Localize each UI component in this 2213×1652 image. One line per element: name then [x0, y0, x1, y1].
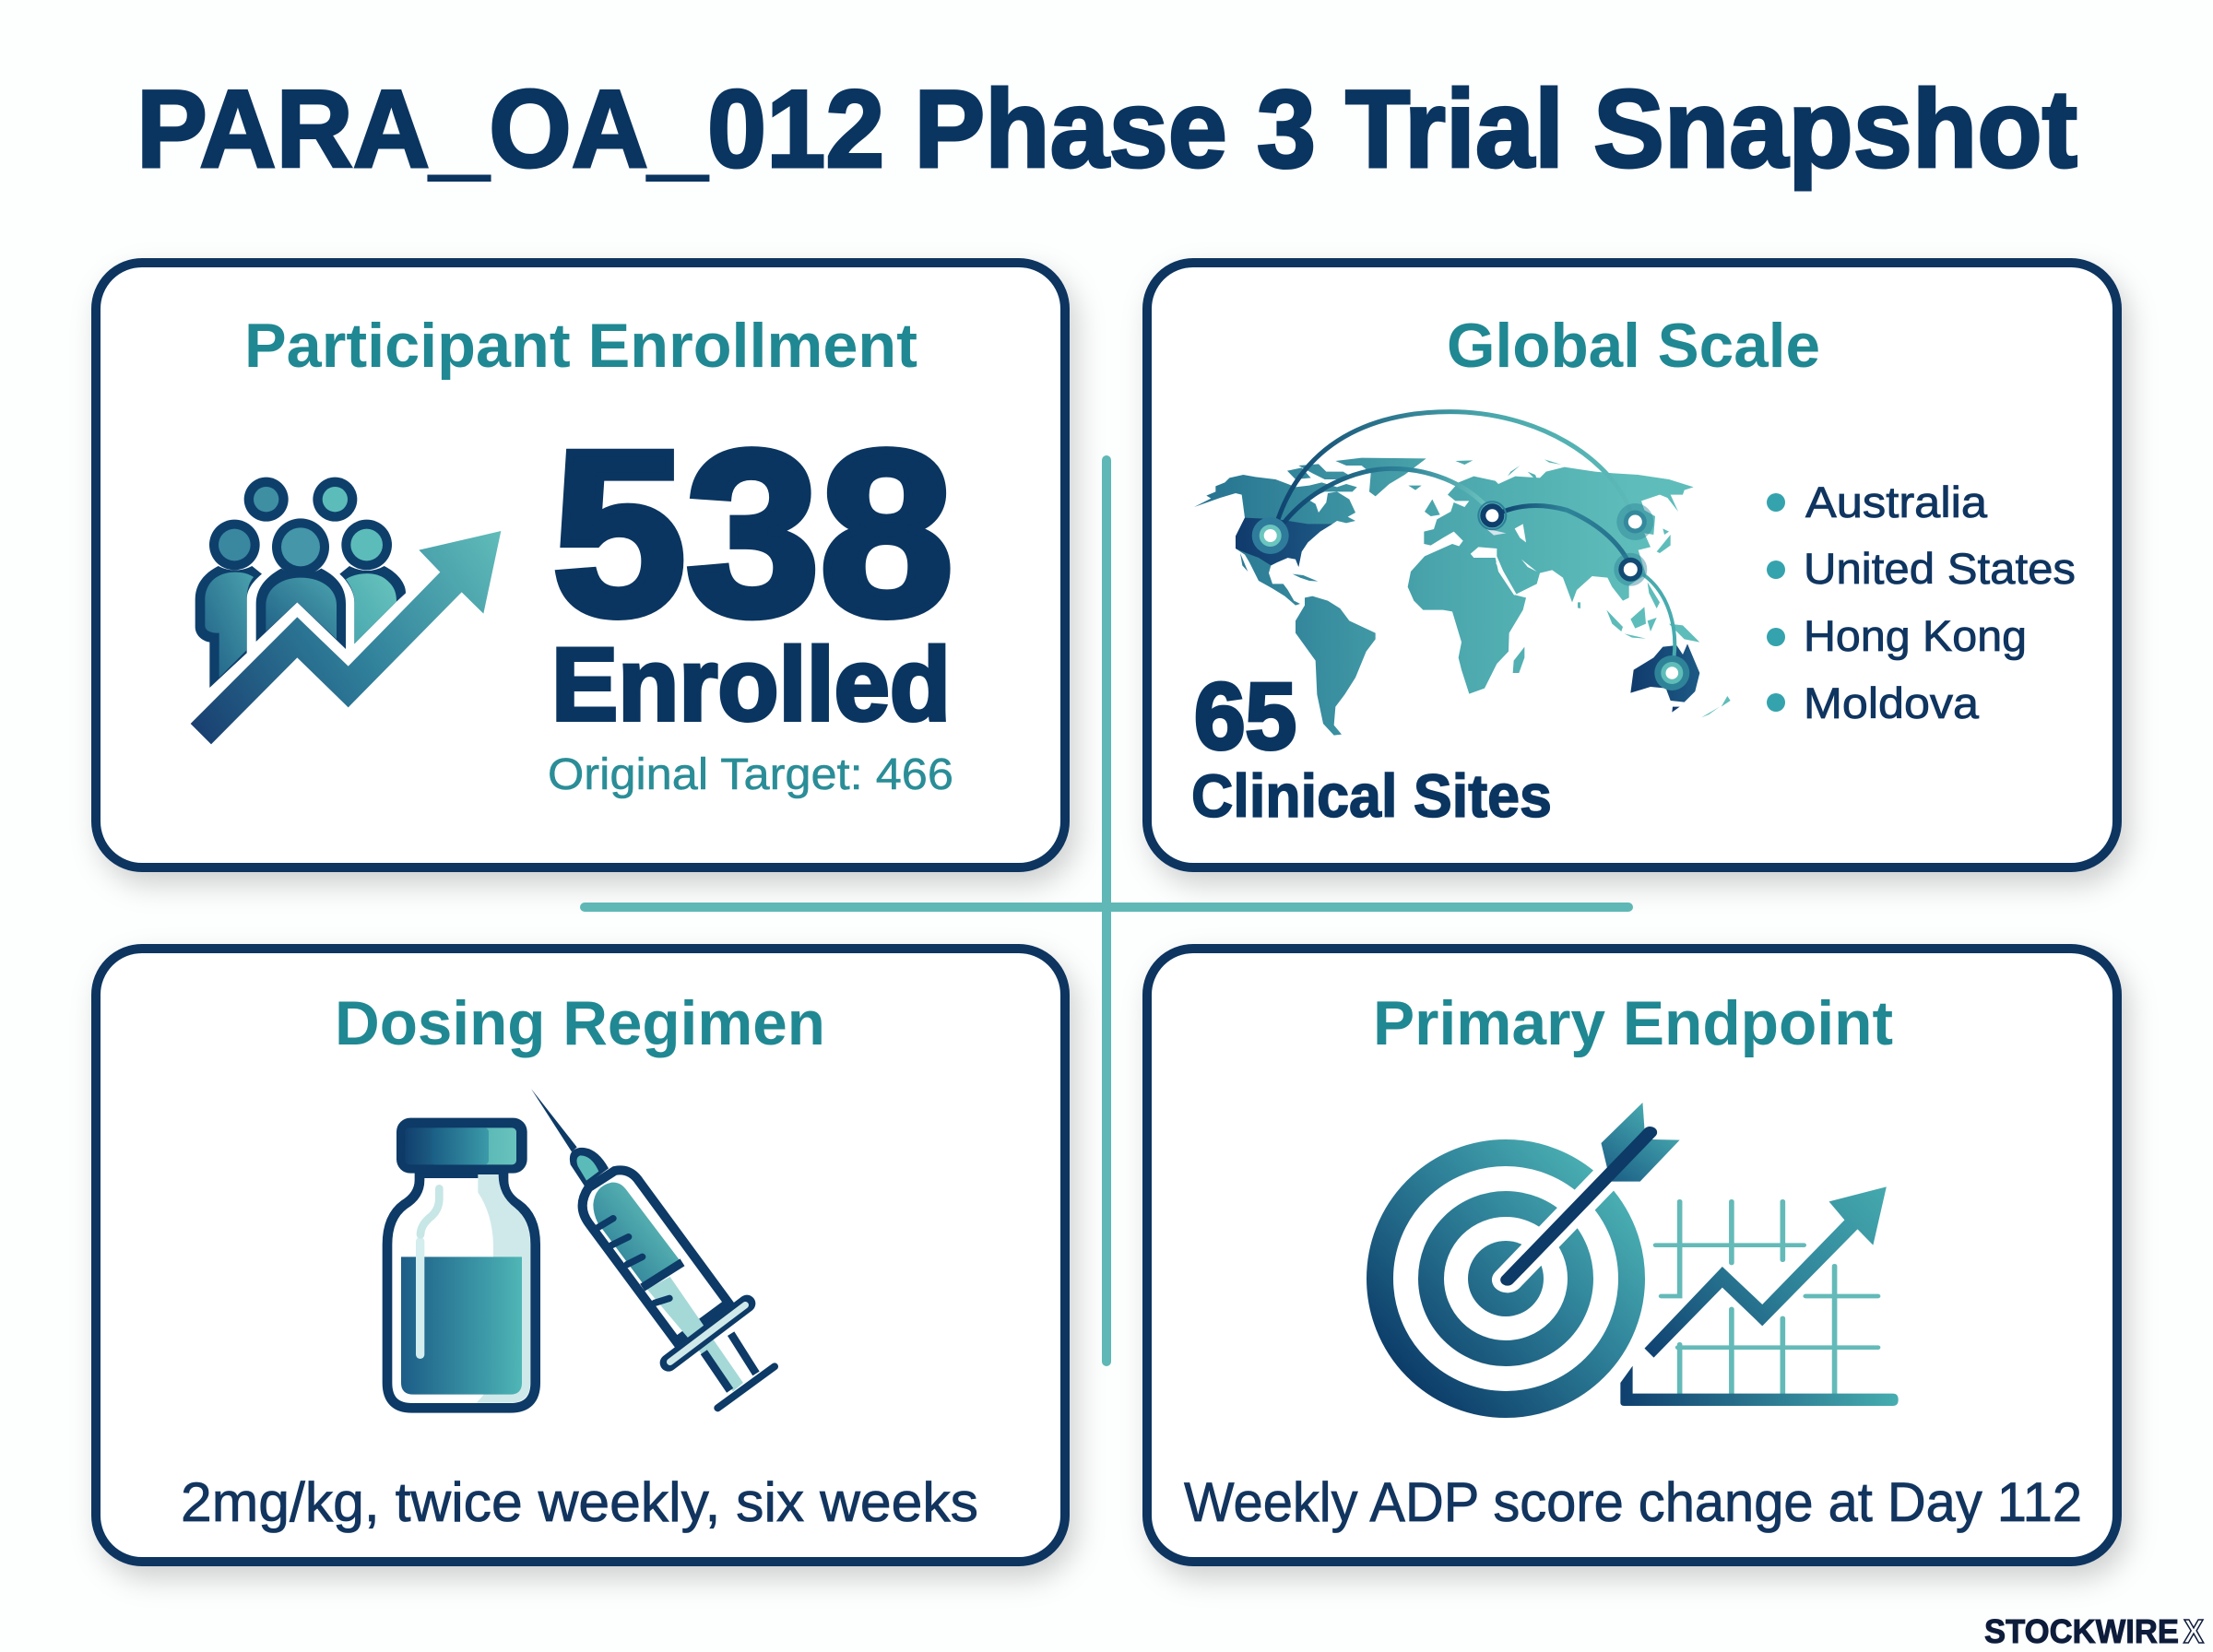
icon: chart grid and rising arrow	[1620, 1186, 1899, 1406]
watermark: stockwire x: X	[2183, 1612, 2204, 1650]
icon: target rings	[1379, 1152, 1632, 1405]
icon: people with rising arrow	[191, 478, 501, 744]
watermark: stockwire x: STOCKWIRE	[1984, 1612, 2179, 1650]
heading: primary endpoint: Primary Endpoint	[1373, 988, 1893, 1058]
number: 538: 538	[552, 402, 953, 664]
world map: americas and greenland	[1194, 458, 1426, 736]
icon: syringe	[531, 1089, 775, 1408]
country list: Hong Kong	[1804, 611, 2027, 660]
map site markers	[1252, 502, 1689, 690]
original target: Original Target: 466	[548, 750, 953, 799]
title: PARA_OA_012 Phase 3 Trial Snapshot	[136, 67, 2077, 191]
heading: dosing regimen: Dosing Regimen	[335, 988, 825, 1058]
endpoint text: Weekly ADP score change at Day 112	[1184, 1471, 2082, 1533]
map route arcs	[1278, 412, 1675, 667]
icon: dart arrow	[1508, 1103, 1680, 1280]
country list: Moldova	[1804, 678, 1980, 727]
site count: 65: 65	[1194, 664, 1296, 769]
dosing text: 2mg/kg, twice weekly, six weeks	[181, 1471, 978, 1533]
country list: United States	[1804, 544, 2076, 593]
cross divider	[580, 455, 1633, 1366]
panel: global scale	[1147, 263, 2117, 867]
label: enrolled: Enrolled	[551, 627, 951, 742]
world map: eurasia, africa, oceania	[1408, 459, 1731, 717]
icon: vial	[387, 1118, 536, 1408]
label: clinical sites: Clinical Sites	[1191, 761, 1552, 830]
heading: global scale: Global Scale	[1447, 311, 1820, 381]
panel: primary endpoint	[1147, 949, 2117, 1562]
panel: participant enrollment	[96, 263, 1065, 867]
country list: Australia	[1805, 478, 1988, 526]
country list	[1767, 478, 2076, 727]
panel: dosing regimen	[96, 949, 1065, 1562]
heading: participant enrollment: Participant Enrollment	[244, 311, 917, 381]
